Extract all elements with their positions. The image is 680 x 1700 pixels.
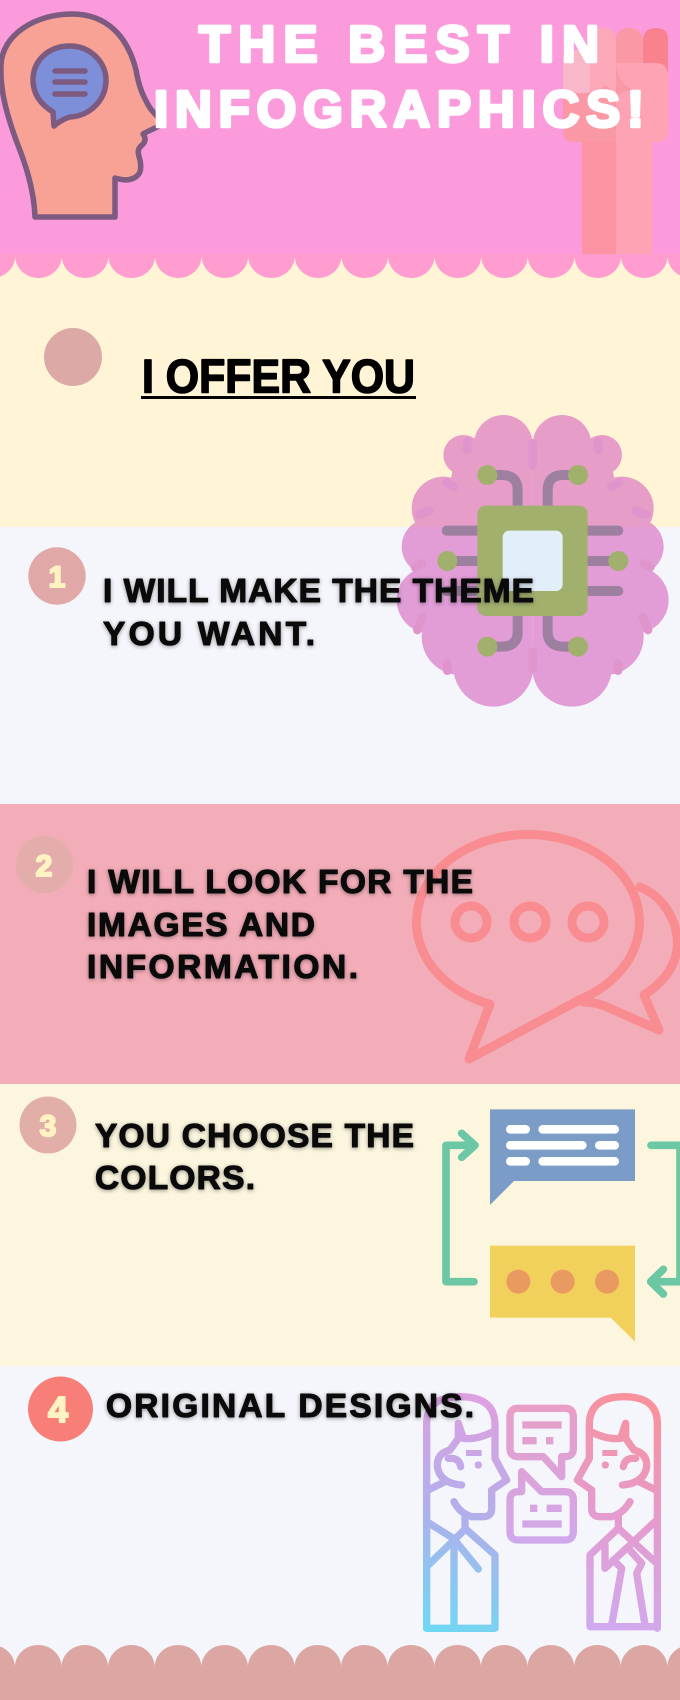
- step 1 text: I WILL MAKE THE THEME: [103, 573, 534, 610]
- step 4 badge: [28, 1376, 93, 1442]
- step 4 badge: 4: [48, 1389, 68, 1430]
- step 1 text: YOU WANT.: [103, 616, 315, 653]
- step 2 badge: 2: [36, 850, 52, 883]
- step 2 text: INFORMATION.: [87, 949, 358, 986]
- title: INFOGRAPHICS!: [154, 80, 644, 138]
- title: [154, 16, 644, 138]
- icon: brain with chip: [397, 415, 669, 707]
- step 1 badge: 1: [49, 561, 65, 594]
- step 4 text: ORIGINAL DESIGNS.: [106, 1388, 474, 1425]
- step 3 text: [95, 1118, 414, 1197]
- icon: chat exchange: [446, 1109, 680, 1342]
- step 3 text: COLORS.: [95, 1160, 255, 1197]
- step 3 text: YOU CHOOSE THE: [95, 1118, 414, 1155]
- icon: head with speech bubble: [1, 14, 163, 217]
- icon: speech bubbles outline: [416, 835, 677, 1059]
- icon: raised fist: [563, 28, 668, 254]
- icon: two people talking: [427, 1397, 657, 1628]
- step 2 text: I WILL LOOK FOR THE: [87, 864, 473, 901]
- bottom scalloped band: [0, 1645, 680, 1700]
- step 2 text: [87, 864, 473, 986]
- step 1 text: [103, 573, 534, 653]
- title: THE BEST IN: [199, 16, 599, 72]
- step 1 badge: [28, 547, 86, 605]
- step 3 badge: 3: [40, 1110, 56, 1143]
- step 3 badge: [20, 1096, 76, 1154]
- step 2 text: IMAGES AND: [87, 907, 315, 944]
- step 2 badge: [16, 836, 73, 893]
- decorative circle: [44, 328, 102, 386]
- panel: pink header: [0, 0, 680, 278]
- heading: I offer you: I OFFER YOU: [142, 350, 415, 402]
